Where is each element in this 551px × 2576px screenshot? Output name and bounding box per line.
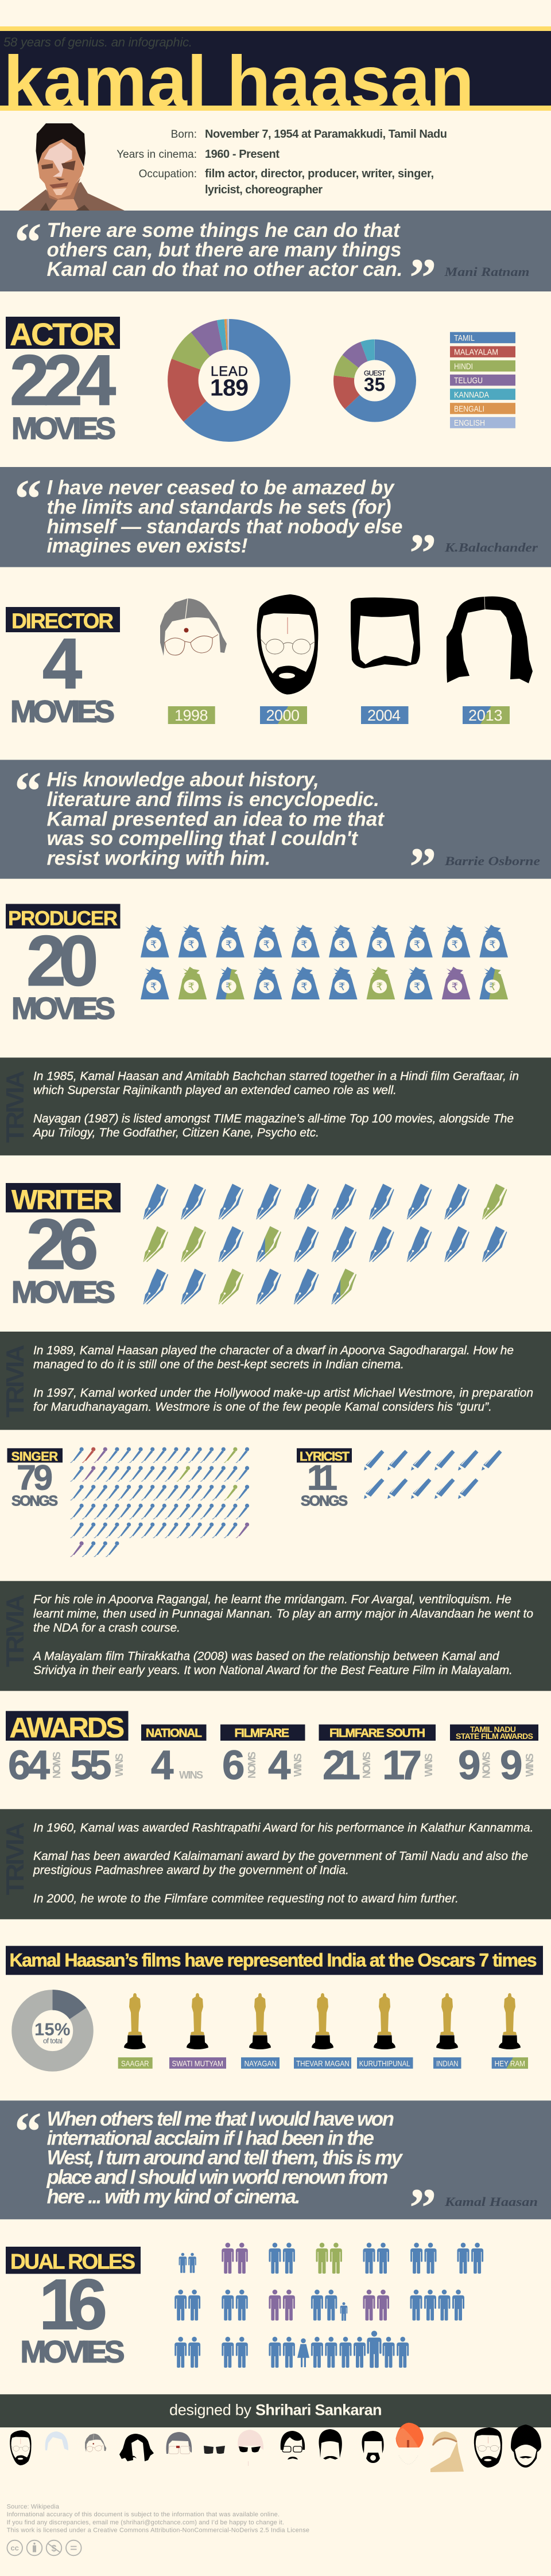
legend: languages [450, 332, 515, 428]
stat: overall 64 nominations 55 wins: WINS [114, 1753, 125, 1777]
stat: 11 songs: 11 [307, 1458, 337, 1497]
trivia text: managed to do it is still one of the best-kept secrets in Indian cinema. [33, 1358, 404, 1371]
film labels: SAAGAR [121, 2059, 149, 2068]
head 10 mouth [370, 2455, 376, 2461]
quote text: literature and films is encyclopedic. [47, 788, 379, 811]
stat: filmfare 6 nominations 4 wins: 6 [222, 1743, 245, 1788]
panel: trivia 2 [0, 1332, 551, 1430]
source notes: This work is licensed under a Creative Commons Attribution-NonCommercial-NoDerivs 2.5 India License [7, 2527, 309, 2534]
donut label: of total [43, 2037, 63, 2045]
icons: oscar statuettes [124, 1993, 521, 2049]
people row 1 [179, 2243, 483, 2274]
category label: filmfare south: FILMFARE SOUTH [329, 1727, 425, 1740]
quote text: was so compelling that I couldn't [47, 827, 358, 850]
trivia text: which Superstar Rajinikanth played an extended cameo role as well. [33, 1084, 397, 1097]
donut chart: 15 percent of total [22, 2000, 83, 2061]
stat: tamil nadu 9 nominations 9 wins: 9 [458, 1743, 481, 1788]
fact values [205, 128, 447, 196]
stat: 16 movies [21, 2265, 125, 2369]
quote text: resist working with him. [47, 847, 271, 870]
head 3 [85, 2434, 106, 2452]
head 14 [511, 2425, 541, 2468]
closing quote mark: ” [409, 836, 436, 897]
donut label: 15% [34, 2019, 70, 2040]
panel: designer credit: Shrihari Sankaran [255, 2401, 382, 2418]
attribution: K.Balachander [444, 540, 538, 554]
source notes: If you find any discrepancies, email me (shrihari@gotchance.com) and I’d be happy to change it. [7, 2519, 284, 2526]
trivia side label: TRIVIA [1, 1071, 29, 1143]
icon: long haired character 2013 [447, 596, 533, 683]
panel: quote Mani Ratnam [0, 211, 551, 308]
stat: 20 movies: MOVIES [11, 991, 115, 1026]
stat: filmfare south 21 nominations 17 wins: NOMS [361, 1752, 372, 1779]
stat: filmfare 6 nominations 4 wins: 4 [268, 1743, 291, 1788]
icon: moustached character 2004 [351, 597, 420, 668]
category label: tamil nadu state film awards [450, 1725, 538, 1741]
quote text [46, 2108, 403, 2208]
fact labels [117, 129, 197, 180]
quote text: the limits and standards he sets (for) [47, 496, 391, 519]
year labels: 2013 [468, 707, 503, 724]
stat: 26 movies: MOVIES [11, 1275, 115, 1310]
film labels: NAYAGAN [245, 2059, 277, 2068]
stat: 4 movies [10, 624, 115, 729]
head 12 [430, 2431, 464, 2472]
legend: languages: KANNADA [454, 390, 489, 400]
closing quote mark: ” [409, 2177, 436, 2238]
panel: quote K.Balachander [0, 467, 551, 583]
legend: languages: HINDI [454, 361, 473, 371]
heading: dual roles: DUAL ROLES [10, 2250, 135, 2273]
stat: 4 movies: 4 [42, 624, 82, 703]
icon row: money bags [141, 925, 508, 958]
fact labels: Years in cinema: [117, 149, 197, 161]
panel: trivia 3 [0, 1581, 551, 1691]
heading: awards: AWARDS [9, 1713, 125, 1744]
quote text: others can, but there are many things [47, 239, 402, 261]
stat: national 4 wins [151, 1743, 203, 1788]
icon row: pens 3 [143, 1268, 356, 1305]
heading: producer: PRODUCER [8, 908, 118, 930]
head 1 [10, 2430, 32, 2465]
heading: oscars [6, 1946, 543, 1975]
trivia text: for Marudhanayagam. Westmore is one of the few people Kamal considers his “guru”. [33, 1400, 492, 1414]
panel: trivia 1 [0, 1057, 551, 1155]
heading: director: DIRECTOR [11, 609, 114, 633]
heading: singer: SINGER [11, 1449, 58, 1464]
panel: director [6, 594, 533, 729]
subtitle: 58 years of genius. an infographic. [3, 35, 192, 49]
panel: writer [6, 1183, 507, 1310]
trivia text: In 1997, Kamal worked under the Hollywood make-up artist Michael Westmore, in preparation [33, 1386, 533, 1399]
attribution: Mani Ratnam [444, 264, 529, 279]
year labels: 2004 [367, 707, 401, 724]
stat: 79 songs: SONGS [11, 1493, 58, 1509]
head 7 [238, 2430, 263, 2466]
legend: languages: BENGALI [454, 404, 484, 414]
stat: 4 movies: MOVIES [10, 695, 115, 729]
donut chart: lead roles by language [183, 334, 275, 426]
trivia side label: TRIVIA [1, 1345, 29, 1418]
icons: creative commons licence: cc [10, 2544, 19, 2552]
panel: singer [7, 1447, 249, 1557]
quote text: Kamal can do that no other actor can. [47, 258, 403, 281]
heading: lyricist: LYRICIST [300, 1449, 350, 1464]
year labels [168, 706, 510, 724]
stat: tamil nadu 9 nominations 9 wins [458, 1743, 536, 1788]
stat: filmfare south 21 nominations 17 wins: 21 [323, 1743, 360, 1788]
stat: 224 movies: 224 [10, 341, 116, 420]
icon grid: pencils [364, 1450, 502, 1499]
donut chart: guest roles by language [344, 350, 406, 412]
icon: grey haired character 1998 [160, 598, 227, 656]
stat: 11 songs [301, 1458, 348, 1509]
trivia side label: TRIVIA [1, 1594, 29, 1667]
year labels: 1998 [174, 707, 208, 724]
trivia text: In 1960, Kamal was awarded Rashtrapathi Award for his performance in Kalathur Kannamma. [33, 1822, 534, 1835]
icon row: character heads [10, 2423, 541, 2472]
trivia text: Kamal has been awarded Kalaimamani award by the government of Tamil Nadu and also the [33, 1850, 528, 1863]
icons: creative commons licence: $ [52, 2544, 57, 2554]
quote text: His knowledge about history, [47, 769, 319, 791]
heading: writer: WRITER [11, 1185, 113, 1216]
quote text [47, 769, 385, 870]
head 11 [396, 2423, 424, 2464]
panel: actor [6, 317, 515, 446]
legend: languages: ENGLISH [454, 418, 485, 428]
stat: filmfare 6 nominations 4 wins: WINS [292, 1753, 304, 1777]
panel: quote Kamal Haasan [0, 2100, 551, 2238]
people row 3 [174, 2330, 409, 2368]
stat: national 4 wins: WINS [179, 1769, 203, 1781]
year labels: 2000 [266, 707, 300, 724]
trivia text: learnt mime, then used in Punnagai Mannan. To play an army major in Alavandaan he went to [33, 1607, 533, 1620]
panel: designer credit: designed by [169, 2401, 251, 2418]
attribution: Kamal Haasan [444, 2194, 538, 2209]
trivia text [32, 1593, 533, 1677]
portrait illustration [18, 123, 125, 211]
source notes: Informational accuracy of this document is subject to the information that was available online. [7, 2511, 280, 2518]
quote text: West, I turn around and tell them, this is my [47, 2147, 403, 2169]
heading: actor: ACTOR [10, 317, 115, 352]
title: kamal haasan [3, 42, 474, 122]
stat: 16 movies: MOVIES [21, 2335, 125, 2369]
fact values: lyricist, choreographer [205, 184, 323, 196]
stat: filmfare 6 nominations 4 wins [222, 1743, 304, 1788]
fact labels: Born: [171, 129, 197, 141]
icon grid: microphones [70, 1447, 249, 1557]
trivia text [32, 1070, 519, 1139]
head 6 [204, 2446, 225, 2454]
stat: overall 64 nominations 55 wins: 55 [70, 1743, 111, 1788]
category label: national: NATIONAL [146, 1727, 202, 1740]
stat: 20 movies [11, 921, 115, 1026]
donut label: lead: 189 [210, 374, 249, 400]
donut label: guest: GUEST [364, 369, 386, 377]
fact values: 1960 - Present [205, 148, 280, 161]
trivia text: the NDA for a crash course. [33, 1621, 180, 1635]
stat: 79 songs: 79 [17, 1458, 53, 1497]
panel: trivia 4 [0, 1809, 551, 1919]
quote text: imagines even exists! [47, 535, 248, 557]
panel: quote Barrie Osborne [0, 760, 551, 897]
stat: filmfare 6 nominations 4 wins: NOMS [246, 1752, 258, 1779]
trivia text: In 1985, Kamal Haasan and Amitabh Bachchan starred together in a Hindi film Geraftaar, in [33, 1070, 519, 1083]
stat: 224 movies: MOVIES [11, 411, 116, 446]
film labels: SWATI MUTYAM [172, 2059, 223, 2068]
icons: creative commons licence [7, 2540, 82, 2555]
panel: lyricist [297, 1448, 502, 1509]
trivia text [33, 1822, 534, 1905]
head 9 [319, 2429, 342, 2460]
category label: filmfare south [319, 1725, 436, 1741]
quote text [47, 219, 403, 281]
opening quote mark: “ [14, 761, 41, 822]
legend: languages: TAMIL [454, 333, 475, 343]
donut label: lead: LEAD [211, 364, 248, 379]
category label: tamil nadu state film awards: TAMIL NADU [470, 1725, 516, 1734]
panel: title banner [0, 26, 551, 122]
fact values: film actor, director, producer, writer, singer, [205, 168, 434, 180]
stat: filmfare south 21 nominations 17 wins: WINS [423, 1753, 434, 1777]
panel: dual roles [6, 2243, 483, 2369]
quote text: I have never ceased to be amazed by [47, 476, 395, 499]
stat: overall 64 nominations 55 wins [8, 1743, 125, 1788]
trivia text: For his role in Apoorva Ragangal, he learnt the mridangam. For Avargal, ventriloquism. He [33, 1593, 511, 1606]
stat: 26 movies: 26 [26, 1205, 99, 1285]
film labels: INDIAN [436, 2059, 458, 2068]
panel: oscars [6, 1946, 543, 2069]
trivia side label: TRIVIA [1, 1822, 29, 1895]
stat: 11 songs: SONGS [301, 1493, 348, 1509]
trivia text: In 2000, he wrote to the Filmfare commitee requesting not to award him further. [33, 1892, 459, 1905]
panel: designer credit [0, 2394, 551, 2427]
heading: oscars: Kamal Haasan’s films have represented India at the Oscars 7 times [9, 1949, 537, 1970]
film labels [118, 2057, 528, 2069]
opening quote mark: “ [14, 468, 41, 529]
closing quote mark: ” [409, 247, 436, 308]
icon row: money bags by language [141, 967, 508, 999]
stat: 16 movies: 16 [39, 2265, 107, 2344]
trivia text [33, 1344, 533, 1414]
quote text: There are some things he can do that [47, 219, 401, 242]
trivia text: Srividya in their early years. It won National Award for the Best Feature Film in Malayalam. [33, 1664, 513, 1677]
panel: producer [6, 904, 508, 1026]
category label: filmfare [220, 1725, 305, 1741]
stat: national 4 wins: 4 [151, 1743, 174, 1788]
source notes [7, 2504, 309, 2534]
legend: languages: TELUGU [454, 376, 483, 386]
head 8 [281, 2431, 305, 2460]
stat: tamil nadu 9 nominations 9 wins: 9 [500, 1743, 522, 1788]
quote text: Kamal presented an idea to me that [47, 808, 385, 831]
head 4 [119, 2434, 154, 2461]
donut label: guest: 35 [364, 374, 385, 395]
icon row: pens 1 [143, 1184, 507, 1220]
head 10 [362, 2431, 384, 2463]
source notes: Source: Wikipedia [7, 2504, 60, 2511]
trivia text: Apu Trilogy, The Godfather, Citizen Kane, Psycho etc. [32, 1126, 319, 1139]
legend: languages: MALAYALAM [454, 348, 498, 357]
head 13 [474, 2427, 502, 2468]
stat: 20 movies: 20 [26, 921, 99, 1001]
attribution: Barrie Osborne [444, 854, 540, 868]
bio facts [117, 128, 447, 196]
fact labels: Occupation: [139, 168, 197, 180]
stat: overall 64 nominations 55 wins: NOMS [51, 1752, 63, 1779]
opening quote mark: “ [14, 212, 41, 273]
film labels: KURUTHIPUNAL [359, 2059, 410, 2068]
film labels: HEY RAM [495, 2059, 525, 2068]
stat: tamil nadu 9 nominations 9 wins: NOMS [481, 1752, 492, 1779]
opening quote mark: “ [14, 2101, 41, 2162]
quote text: international acclaim if I had been in the [47, 2127, 374, 2149]
quote text: place and I should win world renown from [46, 2166, 388, 2189]
panel: awards [6, 1711, 538, 1788]
stat: filmfare south 21 nominations 17 wins: 17 [382, 1743, 422, 1788]
category label: filmfare: FILMFARE [234, 1727, 289, 1740]
closing quote mark: ” [409, 523, 436, 583]
stat: overall 64 nominations 55 wins: 64 [8, 1743, 51, 1788]
trivia text: A Malayalam film Thirakkatha (2008) was based on the relationship between Kamal and [32, 1649, 500, 1663]
stat: 79 songs [11, 1458, 58, 1509]
stat: tamil nadu 9 nominations 9 wins: WINS [524, 1753, 536, 1777]
stat: filmfare south 21 nominations 17 wins [323, 1743, 434, 1788]
quote text: When others tell me that I would have won [47, 2108, 394, 2130]
film labels: THEVAR MAGAN [296, 2059, 350, 2068]
fact values: November 7, 1954 at Paramakkudi, Tamil Nadu [205, 128, 447, 141]
trivia text: prestigious Padmashree award by the government of India. [33, 1864, 349, 1877]
stat: 26 movies [11, 1205, 115, 1310]
trivia text: Nayagan (1987) is listed amongst TIME magazine’s all-time Top 100 movies, alongside The [33, 1112, 514, 1126]
people row 2 [174, 2290, 464, 2321]
quote text: himself — standards that nobody else [47, 515, 403, 538]
quote text [47, 476, 403, 557]
quote text: here ... with my kind of cinema. [47, 2186, 301, 2208]
icon row: pens 2 [143, 1226, 507, 1262]
icon: bearded character 2000 [257, 594, 318, 694]
head 2 [45, 2431, 68, 2450]
head 5 [166, 2432, 192, 2454]
category label: tamil nadu state film awards: STATE FILM AWARDS [456, 1731, 533, 1741]
trivia text: In 1989, Kamal Haasan played the character of a dwarf in Apoorva Sagodharargal. How he [33, 1344, 514, 1357]
